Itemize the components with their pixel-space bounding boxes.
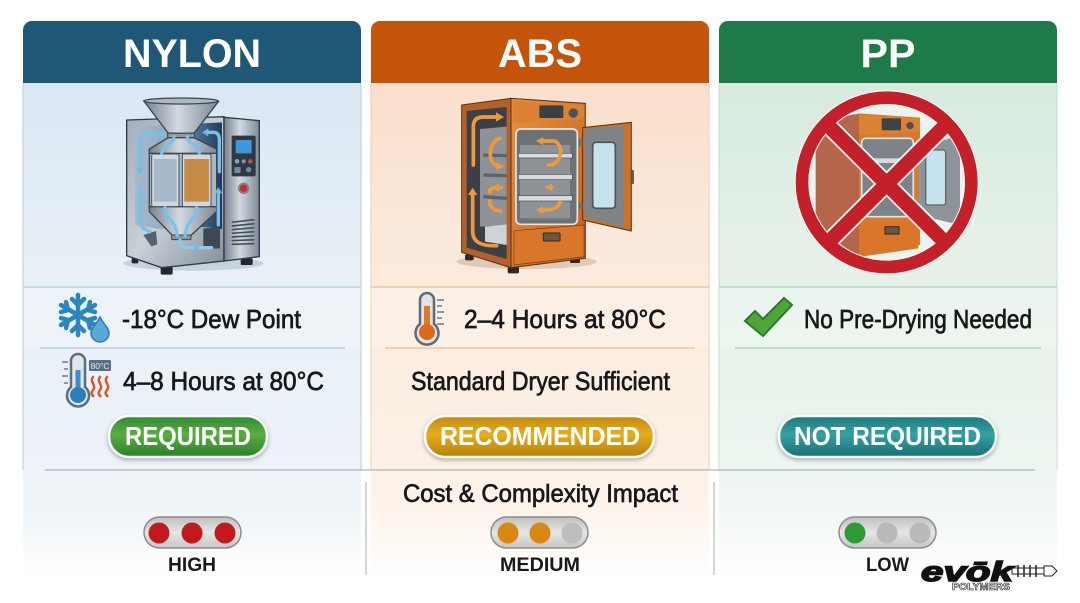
text: 2–4 Hours at 80°C: 2–4 Hours at 80°C bbox=[464, 304, 666, 334]
illustration: standard oven dryer bbox=[457, 98, 634, 273]
text: No Pre-Drying Needed: No Pre-Drying Needed bbox=[804, 304, 1032, 334]
panel background: abs bbox=[371, 83, 709, 580]
panel: ABS bbox=[371, 21, 709, 580]
text: -18°C Dew Point: -18°C Dew Point bbox=[122, 304, 302, 334]
status pill: RECOMMENDED: RECOMMENDED bbox=[440, 421, 640, 451]
indicator: medium cost bbox=[491, 517, 588, 548]
panel background: pp bbox=[719, 83, 1057, 580]
text: Standard Dryer Sufficient: Standard Dryer Sufficient bbox=[411, 366, 671, 396]
logo: evok polymers: POLYMERS bbox=[952, 582, 1010, 593]
icon: snowflake with water drop bbox=[61, 295, 109, 342]
panel: PP bbox=[719, 21, 1057, 580]
subheading: Cost & Complexity Impact: Cost & Complexity Impact bbox=[403, 480, 678, 508]
status pill: NOT REQUIRED: NOT REQUIRED bbox=[794, 421, 981, 451]
heading: PP bbox=[719, 21, 1057, 83]
status pill: REQUIRED bbox=[109, 416, 267, 457]
text: 4–8 Hours at 80°C: 4–8 Hours at 80°C bbox=[123, 366, 324, 396]
heading: NYLON bbox=[23, 21, 361, 83]
heading: NYLON: NYLON bbox=[123, 32, 261, 76]
indicator: low cost bbox=[839, 517, 936, 548]
icon: thermometer with heat bbox=[62, 354, 111, 406]
icon: green check mark bbox=[745, 298, 792, 336]
logo: evok polymers: evōk bbox=[921, 556, 1015, 587]
logo: evok polymers bbox=[921, 556, 1057, 593]
label: MEDIUM: MEDIUM bbox=[500, 555, 580, 576]
panel: NYLON bbox=[23, 21, 361, 580]
icon: thermometer bbox=[415, 293, 444, 345]
heading: PP: PP bbox=[860, 32, 916, 76]
heading: ABS: ABS bbox=[498, 32, 582, 76]
label: HIGH: HIGH bbox=[168, 555, 216, 576]
status pill: REQUIRED: REQUIRED bbox=[125, 421, 251, 451]
icon: thermometer with heat: 80°C bbox=[90, 361, 110, 371]
panel background: nylon bbox=[23, 83, 361, 580]
status pill: NOT REQUIRED bbox=[779, 416, 996, 457]
status pill: RECOMMENDED bbox=[425, 416, 654, 457]
heading: ABS bbox=[371, 21, 709, 83]
label: LOW: LOW bbox=[866, 555, 909, 576]
illustration: crossed-out oven bbox=[802, 98, 971, 267]
indicator: high cost bbox=[144, 517, 241, 548]
illustration: desiccant dryer machine bbox=[123, 98, 263, 275]
